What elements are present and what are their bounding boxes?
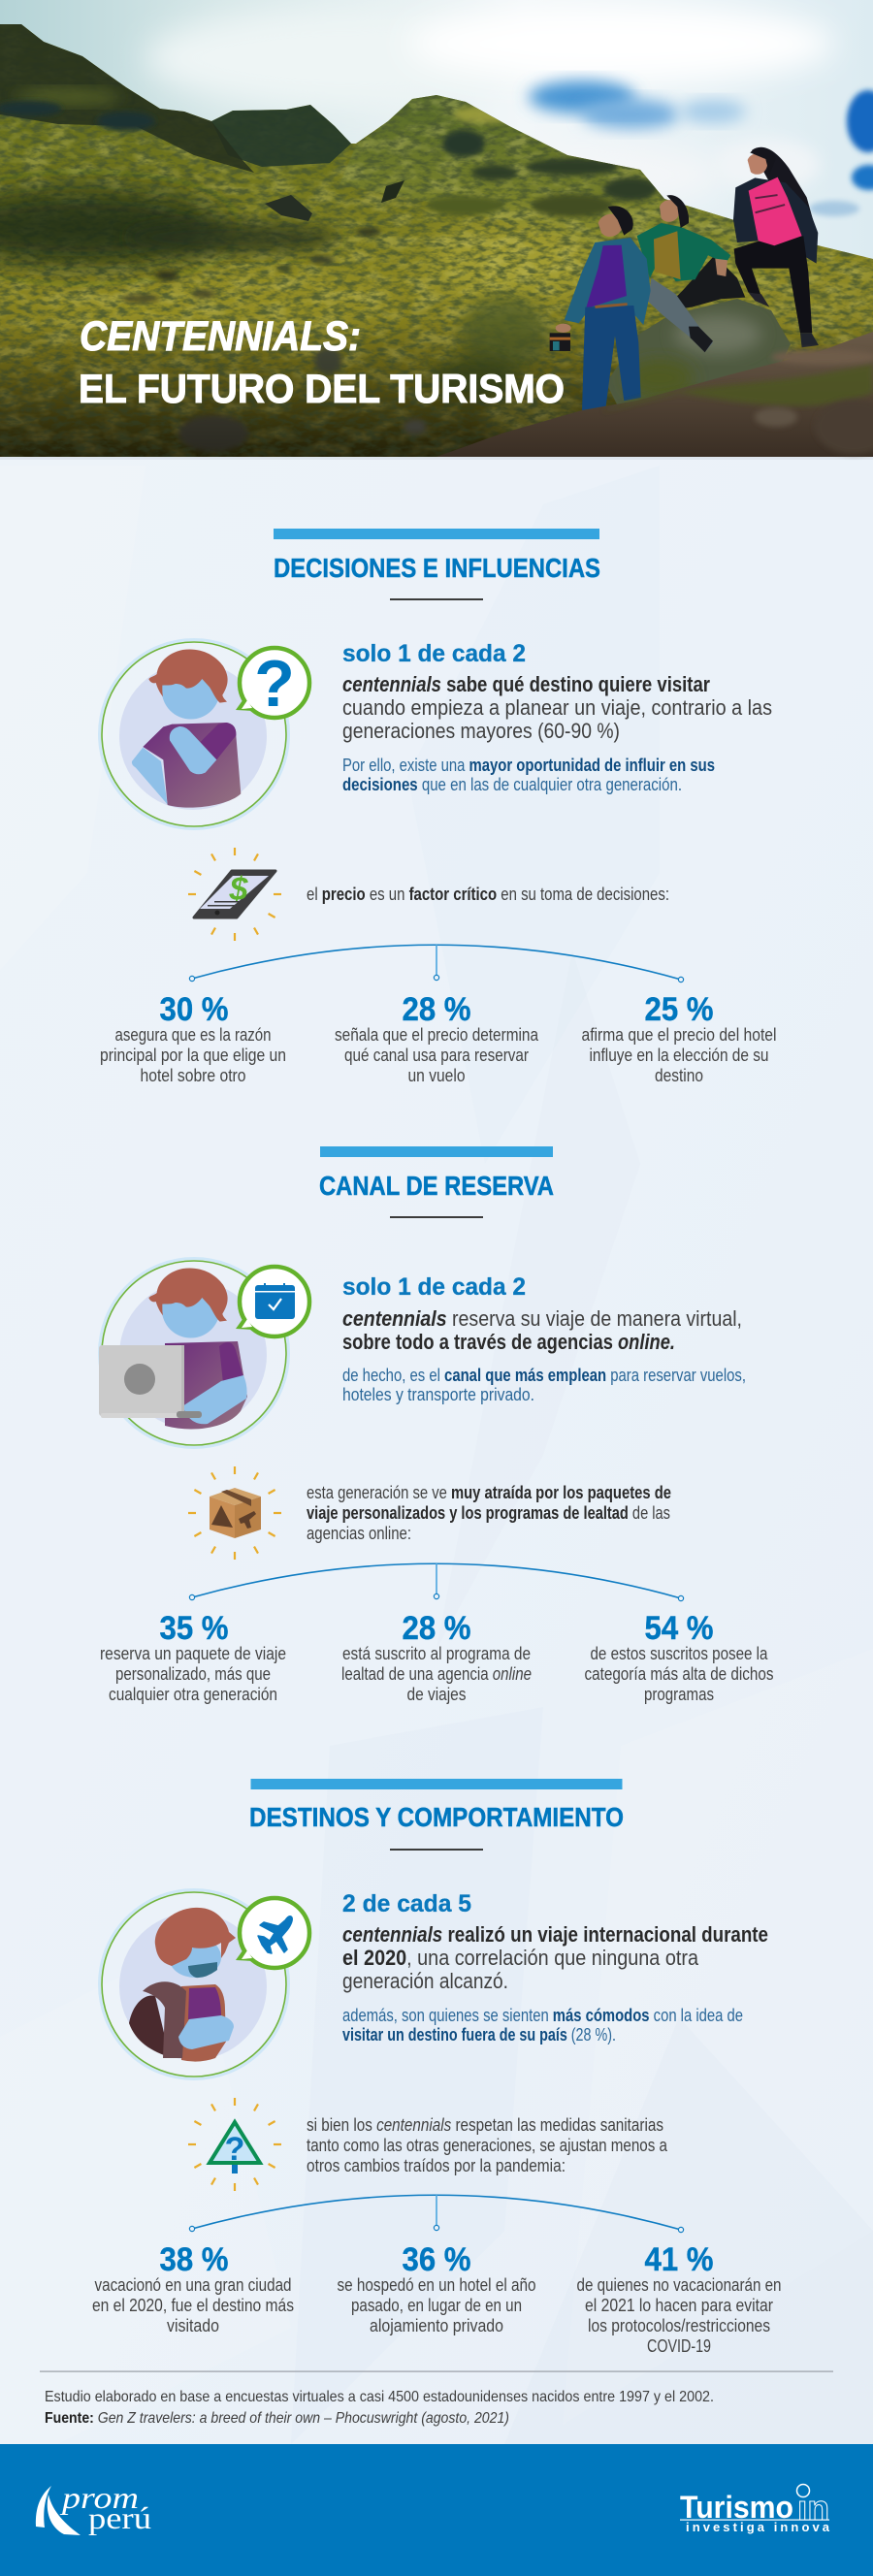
intro sentence: agencias online: xyxy=(307,1524,411,1543)
stat 28 %: señala que el precio determina xyxy=(335,1025,539,1045)
stat 25 %: influye en la elección de su xyxy=(590,1046,768,1065)
supporting note: además, son quienes se sienten más cómodos con la idea de xyxy=(342,2006,743,2025)
stat 28 %: de viajes xyxy=(407,1685,466,1704)
stat 25 %: destino xyxy=(655,1066,703,1085)
stat 41 %: COVID-19 xyxy=(647,2336,711,2356)
intro sentence: otros cambios traídos por la pandemia: xyxy=(307,2156,566,2175)
key fact: solo 1 de cada 2 xyxy=(342,1273,526,1301)
intro sentence: esta generación se ve muy atraída por los paquetes de xyxy=(307,1483,671,1502)
stat 41 %: el 2021 lo hacen para evitar xyxy=(585,2296,773,2315)
stat 30 %: principal por la que elige un xyxy=(100,1046,286,1065)
stat 28 %: qué canal usa para reservar xyxy=(344,1046,529,1065)
supporting note: Por ello, existe una mayor oportunidad de influir en sus xyxy=(342,756,715,775)
logo: PromPerú xyxy=(36,2480,151,2535)
key fact: 2 de cada 5 xyxy=(342,1890,471,1917)
stat 35 % xyxy=(100,1610,286,1704)
fact description: sobre todo a través de agencias online. xyxy=(342,1330,675,1354)
hero photo: mountains and travellers xyxy=(0,0,873,457)
logo: Turismo In: ın xyxy=(797,2488,829,2528)
fact description: centennials reserva su viaje de manera virtual, xyxy=(342,1306,742,1331)
stat 35 %: reserva un paquete de viaje xyxy=(100,1644,286,1663)
stat 25 %: 25 % xyxy=(644,991,714,1028)
icon: calendar xyxy=(255,1283,295,1319)
icon: phone with dollar: $ xyxy=(229,871,249,908)
stat 30 %: hotel sobre otro xyxy=(140,1066,246,1085)
stat 30 %: asegura que es la razón xyxy=(114,1025,272,1045)
intro sentence: el precio es un factor crítico en su toma de decisiones: xyxy=(307,885,669,904)
fact description xyxy=(342,672,772,743)
connector arc xyxy=(189,2195,684,2233)
stat 54 %: programas xyxy=(644,1685,714,1704)
page background xyxy=(0,457,873,2445)
fact description: generaciones mayores (60-90 %) xyxy=(342,719,620,743)
stat 38 %: visitado xyxy=(167,2316,219,2335)
title xyxy=(79,313,565,411)
footer band xyxy=(0,2444,873,2576)
stat 30 % xyxy=(100,991,286,1085)
logo: PromPerú: prom xyxy=(60,2480,139,2515)
stat 28 %: 28 % xyxy=(402,1610,471,1647)
supporting note: decisiones que en las de cualquier otra generación. xyxy=(342,775,682,794)
fact description xyxy=(342,1922,768,1993)
stat 54 % xyxy=(584,1610,774,1704)
stat 28 % xyxy=(341,1610,532,1704)
stat 41 %: los protocolos/restricciones xyxy=(588,2316,770,2335)
intro sentence xyxy=(307,2115,668,2175)
woman in pink shirt xyxy=(733,147,819,347)
connector arc xyxy=(189,1563,684,1601)
heading: DESTINOS Y COMPORTAMIENTO xyxy=(249,1802,624,1832)
section 1: decisiones e influencias xyxy=(99,529,776,1085)
person with laptop and calendar bubble xyxy=(99,1259,309,1447)
stat 35 %: cualquier otra generación xyxy=(109,1685,277,1704)
fact description: centennials sabe qué destino quiere visitar xyxy=(342,672,710,696)
supporting note: hoteles y transporte privado. xyxy=(342,1385,534,1404)
foreground rock xyxy=(436,332,873,457)
sky with clouds xyxy=(0,0,873,281)
supporting note: de hecho, es el canal que más emplean para reservar vuelos, xyxy=(342,1366,746,1385)
logo: Turismo In: Turismo xyxy=(680,2490,793,2525)
logo: PromPerú: perú xyxy=(88,2500,151,2535)
stat 54 %: de estos suscritos posee la xyxy=(590,1644,768,1663)
icon: airplane xyxy=(258,1916,292,1953)
hills xyxy=(0,0,873,457)
seated man in green jacket xyxy=(637,195,745,352)
title: CENTENNIALS: xyxy=(80,313,361,360)
stat 30 %: 30 % xyxy=(159,991,229,1028)
icon: phone with dollar xyxy=(188,848,281,941)
heading: DECISIONES E INFLUENCIAS xyxy=(274,553,600,583)
stat 35 %: 35 % xyxy=(159,1610,229,1647)
section 3: destinos y comportamiento xyxy=(92,1779,782,2356)
stat 28 %: está suscrito al programa de xyxy=(342,1644,531,1663)
source note: Estudio elaborado en base a encuestas virtuales a casi 4500 estadounidenses nacidos entre 1997 y el 2002. xyxy=(45,2389,714,2405)
icon: warning sign with question mark xyxy=(188,2098,281,2191)
stat 36 %: se hospedó en un hotel el año xyxy=(338,2275,535,2295)
source note xyxy=(45,2389,714,2427)
stat 41 %: 41 % xyxy=(644,2241,714,2278)
intro sentence xyxy=(307,1483,671,1543)
fact description: centennials realizó un viaje internacional durante xyxy=(342,1922,768,1947)
stat 36 %: pasado, en lugar de en un xyxy=(351,2296,522,2315)
intro sentence: tanto como las otras generaciones, se ajustan menos a xyxy=(307,2136,668,2155)
stat 36 % xyxy=(338,2241,535,2335)
section bar xyxy=(274,529,599,539)
stat 41 % xyxy=(576,2241,782,2356)
intro sentence: viaje personalizados y los programas de lealtad de las xyxy=(307,1503,670,1523)
stat 25 %: afirma que el precio del hotel xyxy=(582,1025,776,1045)
logo: Turismo In: investiga innova xyxy=(686,2520,830,2534)
heading: CANAL DE RESERVA xyxy=(319,1171,554,1201)
stat 54 %: 54 % xyxy=(644,1610,714,1647)
stat 28 %: 28 % xyxy=(402,991,471,1028)
laptop xyxy=(99,1345,202,1418)
boulder xyxy=(606,299,791,412)
key fact: solo 1 de cada 2 xyxy=(342,640,526,667)
stat 28 %: lealtad de una agencia online xyxy=(341,1664,532,1684)
fact description: cuando empieza a planear un viaje, contrario a las xyxy=(342,695,772,720)
logo: Turismo In xyxy=(680,2485,830,2534)
stat 36 %: alojamiento privado xyxy=(370,2316,503,2335)
travellers xyxy=(550,147,819,412)
fact description: el 2020, una correlación que ninguna otra xyxy=(342,1946,699,1970)
supporting note xyxy=(342,756,715,794)
stat 41 %: de quienes no vacacionarán en xyxy=(576,2275,782,2295)
section bar xyxy=(250,1779,623,1789)
person with question bubble xyxy=(99,640,309,828)
stat 36 %: 36 % xyxy=(402,2241,471,2278)
section 2: canal de reserva xyxy=(99,1146,774,1704)
stat 38 %: 38 % xyxy=(159,2241,229,2278)
supporting note xyxy=(342,1366,746,1404)
stat 25 % xyxy=(582,991,776,1085)
stat 28 %: un vuelo xyxy=(407,1066,466,1085)
person with mask, backpack and plane bubble xyxy=(99,1889,309,2079)
person with question bubble: ? xyxy=(254,647,295,721)
icon: travel package box xyxy=(188,1466,281,1560)
supporting note xyxy=(342,2006,743,2045)
title: EL FUTURO DEL TURISMO xyxy=(79,366,565,411)
standing man in blue jacket xyxy=(550,206,651,412)
stat 35 %: personalizado, más que xyxy=(115,1664,271,1684)
stat 38 %: en el 2020, fue el destino más xyxy=(92,2296,294,2315)
fact description: generación alcanzó. xyxy=(342,1969,508,1993)
stat 54 %: categoría más alta de dichos xyxy=(584,1664,774,1684)
section bar xyxy=(320,1146,553,1157)
source note: Fuente: Gen Z travelers: a breed of their own – Phocuswright (agosto, 2021) xyxy=(45,2410,509,2427)
connector arc xyxy=(189,945,684,982)
stat 38 % xyxy=(92,2241,294,2335)
intro sentence: si bien los centennials respetan las medidas sanitarias xyxy=(307,2115,663,2135)
icon: warning sign with question mark: ? xyxy=(225,2131,244,2168)
stat 38 %: vacacionó en una gran ciudad xyxy=(95,2275,291,2295)
stat 28 % xyxy=(335,991,539,1085)
supporting note: visitar un destino fuera de su país (28 %). xyxy=(342,2025,616,2045)
fact description xyxy=(342,1306,742,1354)
